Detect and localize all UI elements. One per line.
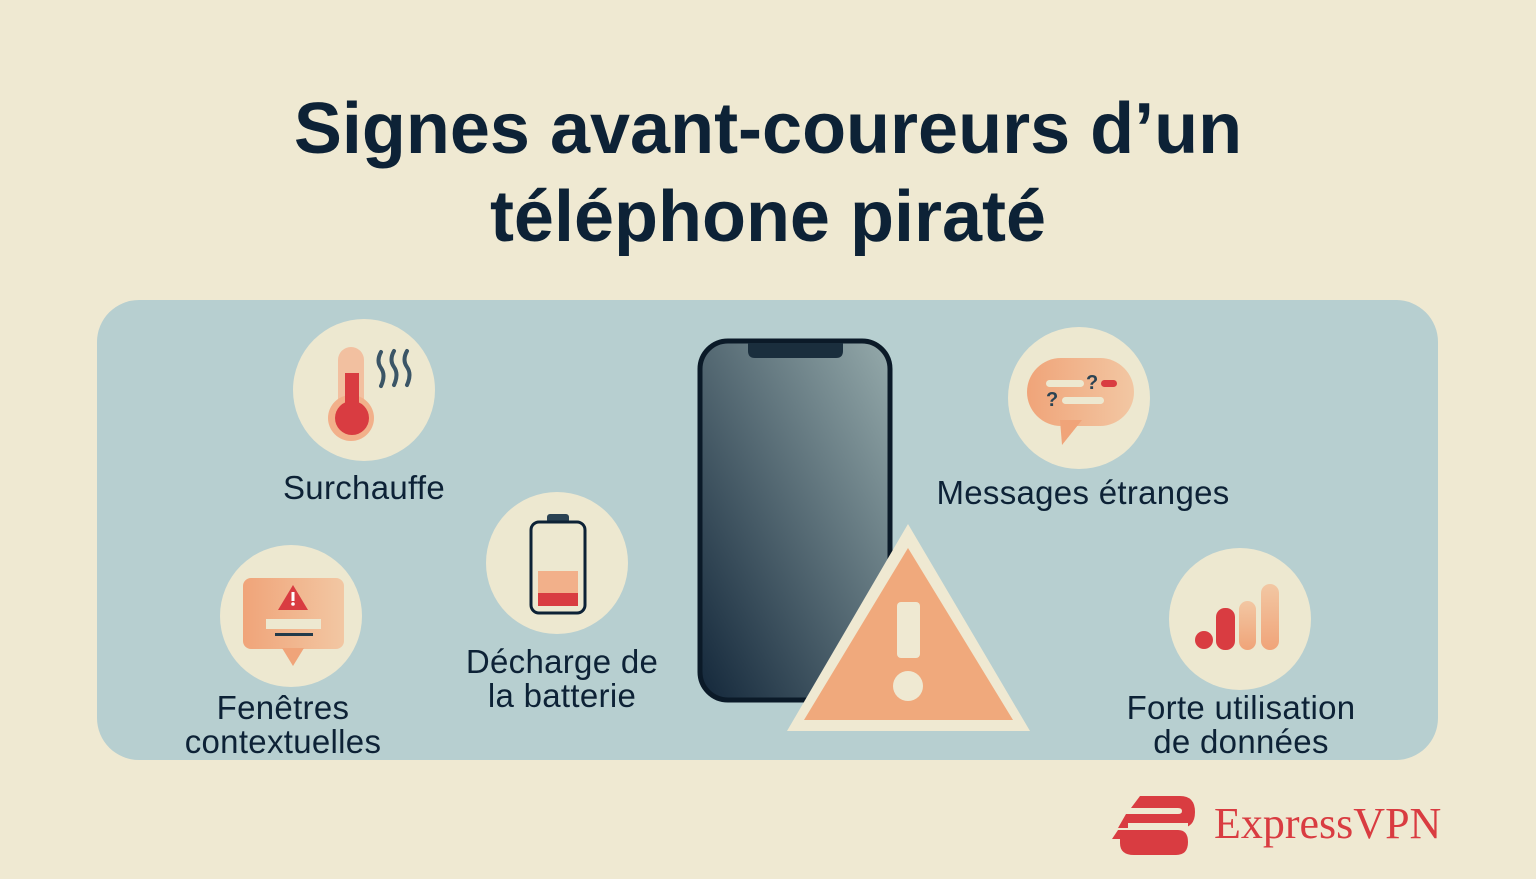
icon: thermometer [293, 319, 435, 461]
logo text: ExpressVPN [1214, 799, 1441, 848]
label: Messages étranges: Messages étranges [936, 474, 1230, 511]
icon: battery [486, 492, 628, 634]
logo icon [1112, 796, 1195, 855]
title: téléphone piraté [490, 177, 1046, 257]
title: Signes avant-coureurs d’un [294, 89, 1242, 169]
icon: messages [1008, 327, 1150, 469]
title [294, 89, 1242, 257]
label: Décharge de la batterie: la batterie [488, 677, 636, 714]
label: Décharge de la batterie: Décharge de [466, 643, 658, 680]
icon: warning triangle [787, 524, 1030, 731]
label: Forte utilisation de données [1127, 689, 1355, 760]
label: Décharge de la batterie [466, 643, 658, 714]
label: Fenêtres contextuelles: Fenêtres [217, 689, 349, 726]
label: Surchauffe: Surchauffe [283, 469, 445, 506]
label: Fenêtres contextuelles [185, 689, 381, 760]
icon: messages: ? [1086, 372, 1098, 394]
icon: messages: ? [1046, 389, 1058, 411]
label: Fenêtres contextuelles: contextuelles [185, 723, 381, 760]
label: Forte utilisation de données: de données [1153, 723, 1329, 760]
icon: data bars [1169, 548, 1311, 690]
label: Forte utilisation de données: Forte utilisation [1127, 689, 1355, 726]
phone [700, 341, 890, 700]
panel: signs [97, 300, 1438, 760]
icon: popup [220, 545, 362, 687]
